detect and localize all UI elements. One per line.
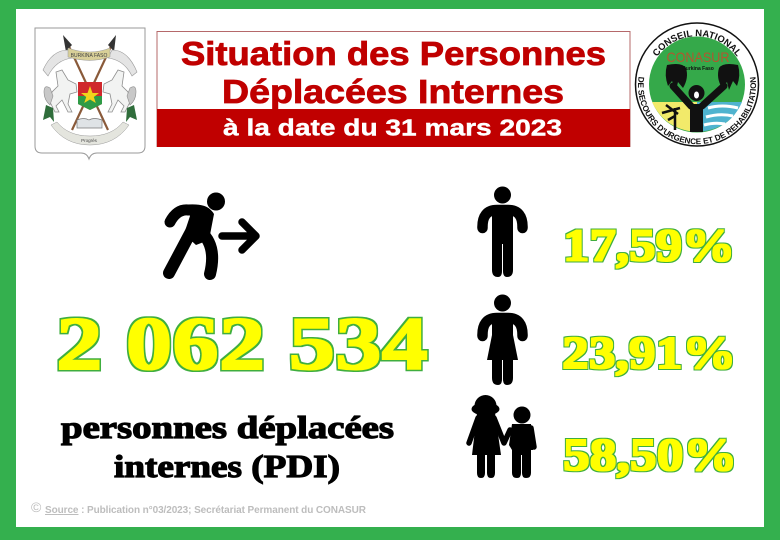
icon: CONASUR logo: Burkina Faso	[682, 66, 714, 72]
icon: CONASUR logo	[634, 22, 760, 147]
label: personnes déplacées internes: personnes déplacées	[61, 409, 394, 445]
icon: person leaving with arrow	[169, 192, 256, 274]
percentage: men: 17,59%	[563, 220, 735, 270]
date band	[157, 109, 630, 147]
panel: title banner	[157, 32, 630, 147]
icon: coat of arms of Burkina Faso: Progrès	[81, 138, 98, 143]
percentage: children: 58,50%	[563, 430, 737, 480]
icon: man	[482, 186, 523, 277]
source note	[31, 499, 367, 516]
icon: CONASUR logo: CONASUR	[666, 49, 730, 65]
icon: woman	[482, 294, 523, 385]
percentage: women: 23,91%	[562, 328, 736, 378]
icon: coat of arms of Burkina Faso: BURKINA FASO	[71, 53, 107, 59]
title line 2: Déplacées Internes	[222, 73, 564, 110]
source note: ©	[31, 499, 42, 515]
big number: 2 062 534	[56, 303, 428, 386]
date band: à la date du 31 mars 2023	[223, 114, 562, 140]
icon: CONASUR logo: CONSEIL NATIONAL	[653, 30, 740, 57]
label: personnes déplacées internes	[61, 409, 394, 484]
icon: CONASUR logo: DE SECOURS D'URGENCE ET DE REHABILITATION	[638, 77, 756, 144]
icon: coat of arms of Burkina Faso	[35, 28, 145, 159]
icon: woman and child	[469, 395, 534, 478]
label: personnes déplacées internes: internes (PDI)	[114, 448, 340, 484]
source note: Source : Publication n°03/2023; Secrétariat Permanent du CONASUR	[45, 505, 367, 516]
title line 1: Situation des Personnes	[181, 35, 606, 72]
